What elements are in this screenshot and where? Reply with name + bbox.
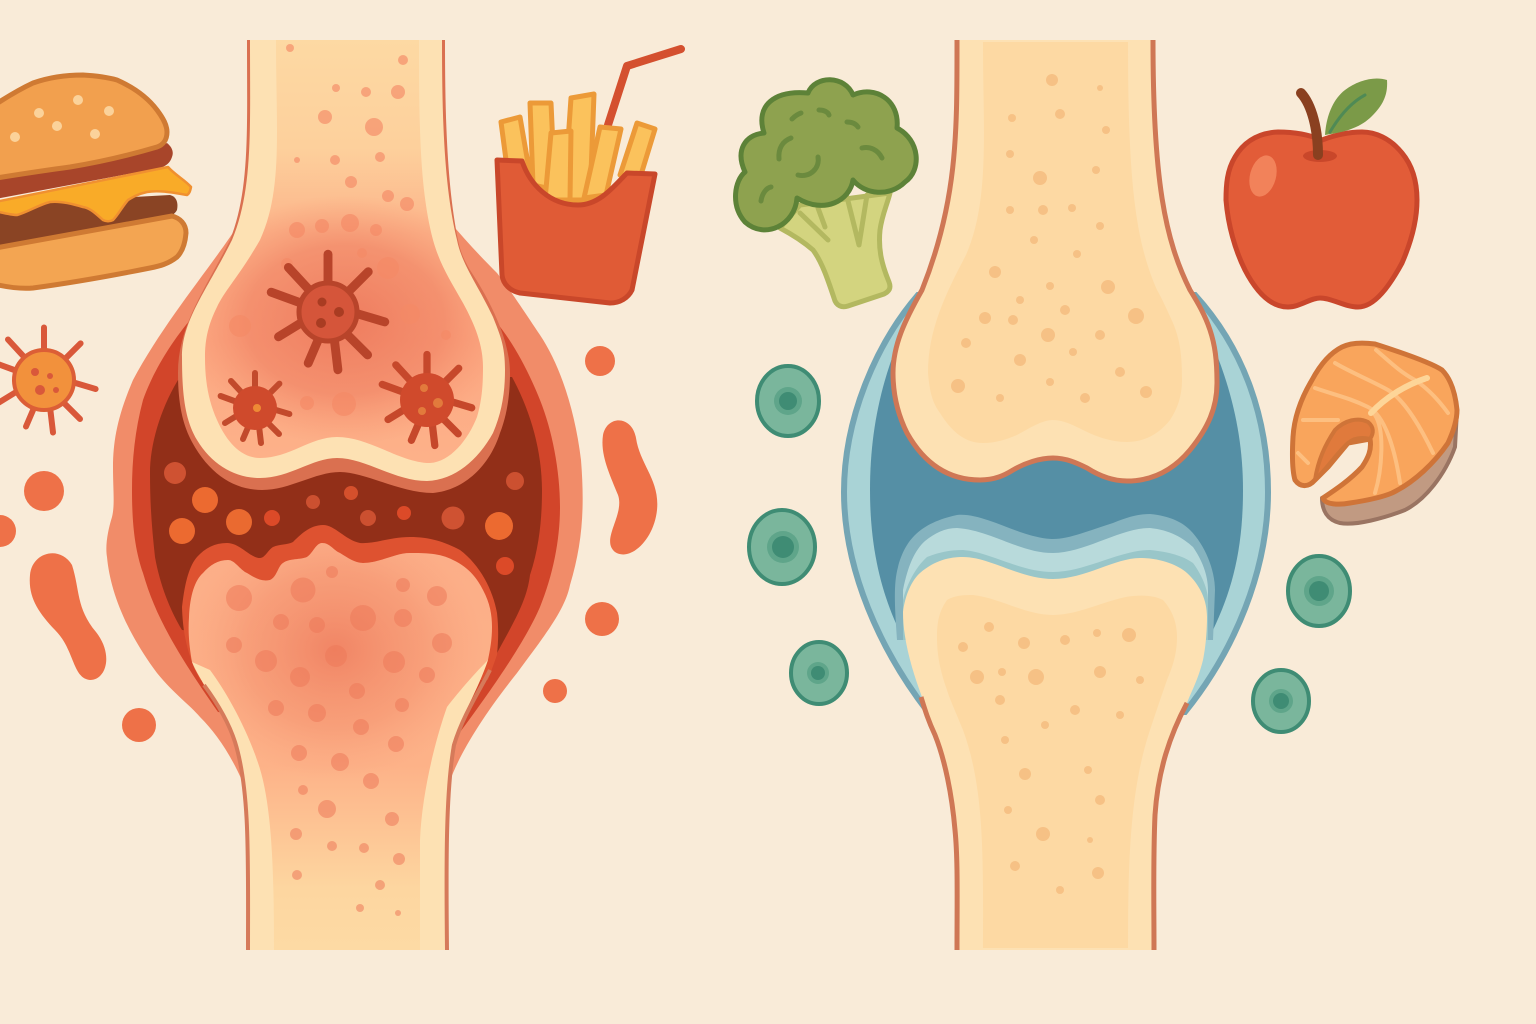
lower inflamed bone (182, 520, 498, 950)
apple leaf (1325, 78, 1387, 135)
patty (0, 195, 177, 247)
sesame seeds (10, 95, 114, 142)
eroded cartilage band (182, 525, 498, 680)
upper inflammation glow (208, 209, 480, 426)
broccoli stem (780, 193, 890, 307)
dark joint space (150, 377, 542, 653)
upper bone cartilage (182, 40, 505, 481)
broccoli crown (736, 80, 916, 230)
blob right (602, 420, 657, 554)
icon: fries and straw (497, 49, 681, 303)
broccoli florets (761, 110, 882, 201)
burger bun bottom (0, 216, 186, 288)
lower healthy bone (903, 557, 1207, 950)
upper healthy cartilage (893, 40, 1217, 481)
apple leaf midrib (1330, 95, 1365, 132)
apple stem (1301, 93, 1318, 155)
healthy green cells (749, 366, 1350, 732)
broccoli stem lines (800, 195, 867, 245)
burger bun top (0, 75, 167, 179)
cell 1 (757, 366, 819, 436)
upper inflamed bone (178, 40, 510, 493)
cheese (0, 167, 191, 221)
virus medium (382, 354, 472, 446)
inflamed joint (106, 40, 583, 950)
fries (501, 94, 655, 200)
upper bone outer band (178, 40, 510, 493)
outer inflamed capsule (106, 222, 583, 800)
virus small (221, 373, 289, 443)
apple dimple (1303, 150, 1337, 162)
cell 4 (1288, 556, 1350, 626)
icon: broccoli (736, 80, 916, 307)
icon: salmon (1292, 343, 1457, 524)
tomato layer (0, 143, 173, 200)
left lower outline (204, 685, 248, 950)
salmon highlight (1371, 378, 1427, 413)
inflamed fluid cells (164, 462, 524, 575)
virus outside joint (0, 328, 96, 432)
virus large (271, 254, 385, 370)
synovial fluid (870, 350, 1243, 632)
lower healthy left outline (921, 697, 957, 950)
salmon notch (1315, 420, 1373, 480)
fries cup (497, 160, 655, 303)
lower bone pores (226, 566, 452, 916)
cell 2 (749, 510, 815, 584)
apple body (1226, 132, 1417, 307)
icon: burger (0, 75, 191, 288)
lower inflammation glow (220, 552, 450, 751)
straw (608, 49, 681, 125)
lower healthy cartilage (903, 557, 1207, 950)
upper bone pores (229, 44, 451, 416)
lower cartilage thin band (903, 550, 1208, 640)
salmon skin (1322, 410, 1457, 524)
upper healthy marrow (928, 42, 1182, 443)
cell 3 (791, 642, 847, 704)
red synovial layer (132, 320, 560, 735)
upper bone marrow (205, 40, 483, 463)
salmon flesh (1292, 343, 1457, 504)
apple highlight (1245, 152, 1281, 200)
healthy joint (844, 40, 1268, 950)
lower cartilage light band (903, 528, 1208, 640)
lower bone marrow (189, 543, 492, 950)
left lower cartilage (192, 662, 274, 950)
lower cartilage outer band (895, 514, 1215, 640)
lower healthy right outline (1154, 703, 1187, 950)
lower healthy marrow (937, 595, 1177, 948)
cell 5 (1253, 670, 1309, 732)
capsule outer (844, 295, 1268, 712)
lower healthy pores (958, 622, 1144, 894)
salmon lines (1298, 350, 1448, 493)
icon: apple (1226, 78, 1417, 307)
inflammatory droplets (0, 346, 657, 742)
upper healthy pores (951, 74, 1152, 403)
right lower outline (447, 670, 490, 950)
right lower cartilage (420, 660, 488, 950)
upper healthy bone (893, 40, 1217, 481)
blob left (30, 553, 106, 680)
